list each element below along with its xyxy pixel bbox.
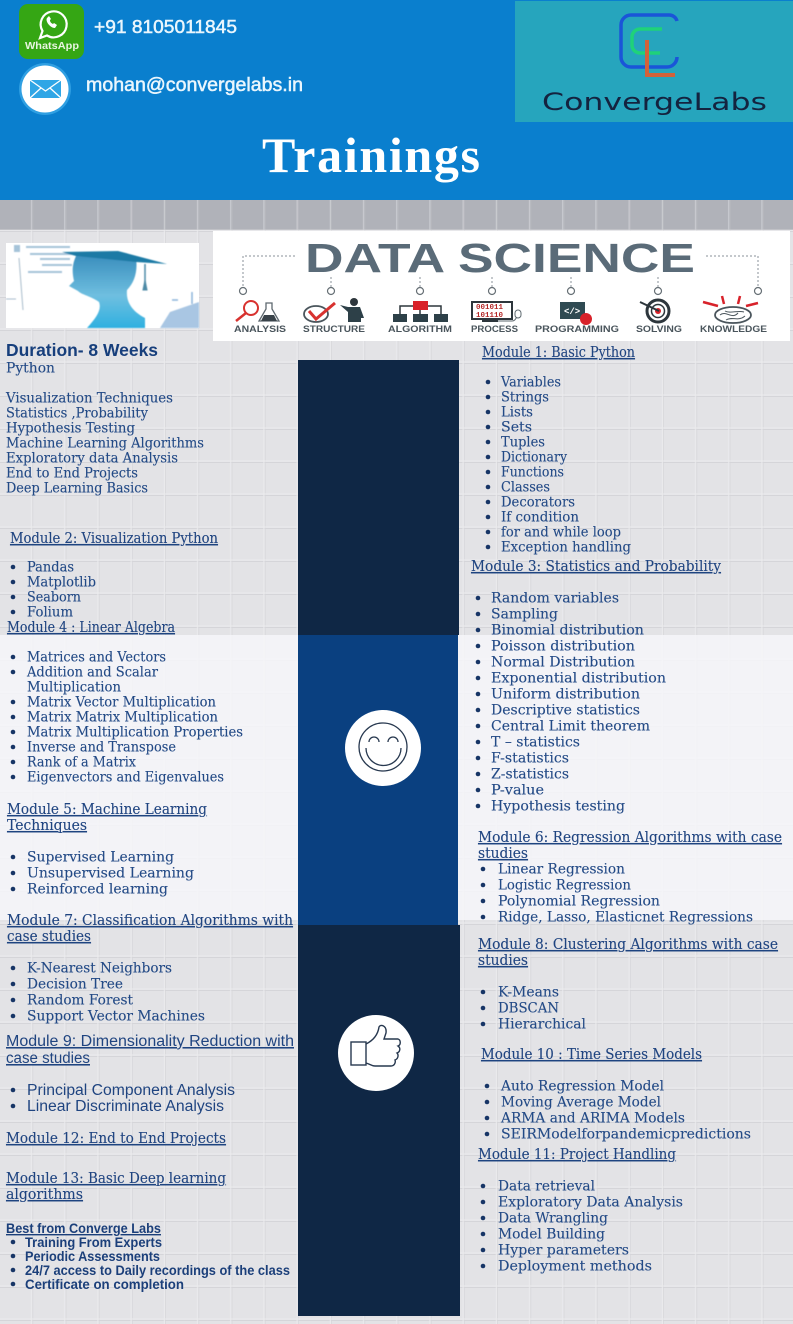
module 6: Module 6: Regression Algorithms with case (478, 830, 782, 846)
module 11: Data Wrangling (498, 1211, 608, 1227)
module 3: Exponential distribution (491, 671, 666, 687)
module 9 (6, 1033, 294, 1115)
overview list: Visualization Techniques (5, 391, 173, 407)
module 4: Rank of a Matrix (27, 755, 136, 771)
module 1: Variables (500, 375, 561, 391)
overview list: Exploratory data Analysis (6, 451, 178, 467)
module 1 (482, 345, 635, 556)
module 3: P-value (491, 783, 544, 799)
best from converge labs: Certificate on completion (25, 1276, 184, 1292)
icon: knowledge (703, 296, 758, 323)
module 6 (478, 830, 782, 926)
banner connector dots (240, 288, 762, 294)
banner labels: ANALYSIS (234, 324, 286, 335)
module 11: Hyper parameters (498, 1243, 629, 1259)
module 6: Linear Regression (498, 862, 625, 878)
module 1: Module 1: Basic Python (482, 345, 635, 361)
module 5: Techniques (7, 818, 87, 834)
overview list: End to End Projects (6, 466, 138, 482)
icon: process (472, 302, 521, 322)
module 13: Module 13: Basic Deep learning (6, 1171, 226, 1187)
icon: analysis (236, 301, 279, 321)
module 5: Unsupervised Learning (27, 866, 194, 882)
module 1: Decorators (501, 495, 575, 511)
module 3: Poisson distribution (491, 639, 635, 655)
banner labels: PROGRAMMING (535, 324, 619, 335)
module 3 (471, 559, 722, 815)
left column: duration and overview (5, 340, 204, 497)
icon: email (19, 63, 71, 115)
icon: smiley (345, 710, 421, 786)
module 10: SEIRModelforpandemicpredictions (501, 1127, 751, 1143)
module 2: Matplotlib (27, 575, 96, 591)
module 10: Module 10 : Time Series Models (481, 1047, 702, 1063)
module 7: Support Vector Machines (27, 1009, 205, 1025)
module 6: Polynomial Regression (498, 894, 660, 910)
best from converge labs (6, 1220, 290, 1292)
banner labels (234, 324, 767, 335)
module 3: Random variables (491, 591, 619, 607)
overview list: Statistics ,Probability (6, 406, 148, 422)
module 10: ARMA and ARIMA Models (500, 1111, 685, 1127)
module 6: Ridge, Lasso, Elasticnet Regressions (498, 910, 753, 926)
banner labels: ALGORITHM (388, 324, 452, 335)
data science banner (213, 231, 790, 341)
icon: structure (304, 298, 364, 322)
duration heading: Duration- 8 Weeks (6, 340, 158, 360)
best from converge labs: Periodic Assessments (25, 1248, 160, 1264)
module 2 (10, 531, 218, 621)
module 2: Pandas (27, 560, 74, 576)
header band (0, 0, 793, 200)
module 1: Tuples (501, 435, 545, 451)
banner labels: PROCESS (471, 324, 518, 335)
module 1: for and while loop (501, 525, 621, 541)
module 7: case studies (7, 929, 91, 945)
module 4: Inverse and Transpose (27, 740, 176, 756)
module 10 (481, 1047, 751, 1143)
module 3: Z-statistics (491, 767, 569, 783)
module 1: Functions (501, 465, 564, 481)
module 5 (7, 802, 207, 898)
logo panel: ConvergeLabs (542, 88, 767, 116)
module 13: algorithms (6, 1187, 83, 1203)
banner labels: SOLVING (636, 324, 682, 335)
module 3: Binomial distribution (491, 623, 644, 639)
module 3: Sampling (491, 607, 558, 623)
module 5: Reinforced learning (27, 882, 168, 898)
module 7: Module 7: Classification Algorithms with (7, 913, 293, 929)
best from converge labs: Best from Converge Labs (6, 1220, 161, 1236)
best from converge labs: 24/7 access to Daily recordings of the class (25, 1262, 290, 1278)
module 4: Matrix Multiplication Properties (27, 725, 243, 741)
phone number: +91 8105011845 (94, 16, 237, 37)
module 4: Module 4 : Linear Algebra (7, 620, 175, 636)
module 12: Module 12: End to End Projects (6, 1131, 226, 1147)
banner labels: STRUCTURE (303, 324, 365, 335)
module 11 (478, 1147, 683, 1275)
module 8: DBSCAN (498, 1001, 559, 1017)
module 6: Logistic Regression (498, 878, 631, 894)
module 11: Exploratory Data Analysis (498, 1195, 683, 1211)
overview list: Deep Learning Basics (6, 481, 148, 497)
module 5: Supervised Learning (27, 850, 174, 866)
overview list: Hypothesis Testing (6, 421, 135, 437)
module 11: Data retrieval (498, 1179, 595, 1195)
module 9: Module 9: Dimensionality Reduction with (6, 1033, 294, 1050)
module 1: If condition (501, 510, 579, 526)
module 1: Strings (501, 390, 549, 406)
icon: process: 001011 (476, 304, 504, 312)
module 3: Module 3: Statistics and Probability (471, 559, 722, 575)
module 8: studies (478, 953, 528, 969)
module 3: F-statistics (491, 751, 569, 767)
icon: WhatsApp (19, 4, 84, 59)
module 3: Uniform distribution (491, 687, 640, 703)
module 13 (6, 1171, 226, 1203)
module 2: Folium (27, 605, 73, 621)
module 3: Hypothesis testing (491, 799, 625, 815)
best from converge labs: Training From Experts (25, 1234, 162, 1250)
module 8: Hierarchical (498, 1017, 586, 1033)
overview list (5, 361, 204, 497)
module 7: Decision Tree (27, 977, 123, 993)
center column (298, 360, 460, 1316)
banner labels: KNOWLEDGE (700, 324, 767, 335)
module 2: Module 2: Visualization Python (10, 531, 218, 547)
module 7 (7, 913, 293, 1025)
icon: programming: </> (564, 307, 580, 317)
icon: thumbs up (338, 1015, 414, 1091)
overview list: Python (6, 361, 55, 377)
module 9: Principal Component Analysis (27, 1082, 235, 1099)
module 1: Dictionary (501, 450, 567, 466)
module 11: Module 11: Project Handling (478, 1147, 676, 1163)
module 8: K-Means (498, 985, 559, 1001)
module 3: Central Limit theorem (491, 719, 650, 735)
logo panel (515, 1, 793, 122)
module 2: Seaborn (27, 590, 81, 606)
banner connectors (243, 256, 758, 287)
email address: mohan@convergelabs.in (86, 74, 303, 96)
module 5: Module 5: Machine Learning (7, 802, 207, 818)
module 9: Linear Discriminate Analysis (27, 1098, 224, 1115)
icon: solving (640, 300, 669, 322)
module 4 (7, 620, 243, 786)
module 4: Multiplication (27, 680, 121, 696)
title: Trainings (262, 127, 480, 183)
icon: programming (560, 302, 592, 325)
module 11: Model Building (498, 1227, 605, 1243)
icon: algorithm (393, 301, 448, 322)
module 4: Matrices and Vectors (27, 650, 166, 666)
module 4: Matrix Matrix Multiplication (27, 710, 218, 726)
module 9: case studies (6, 1050, 90, 1067)
module 4: Eigenvectors and Eigenvalues (27, 770, 224, 786)
module 8: Module 8: Clustering Algorithms with case (478, 937, 778, 953)
module 3: Normal Distribution (491, 655, 635, 671)
icon: WhatsApp: WhatsApp (25, 40, 79, 52)
module 10: Moving Average Model (501, 1095, 661, 1111)
module 11: Deployment methods (498, 1259, 652, 1275)
module 1: Lists (501, 405, 533, 421)
overview list: Machine Learning Algorithms (6, 436, 204, 452)
module 3: T – statistics (491, 735, 580, 751)
module 10: Auto Regression Model (500, 1079, 664, 1095)
module 1: Exception handling (501, 540, 631, 556)
module 4: Matrix Vector Multiplication (27, 695, 216, 711)
module 1: Sets (501, 420, 532, 436)
module 7: Random Forest (27, 993, 134, 1009)
icon: process: 101110 (476, 312, 504, 320)
module 7: K-Nearest Neighbors (27, 961, 172, 977)
module 6: studies (478, 846, 528, 862)
image: graduate head (6, 243, 199, 328)
module 1: Classes (501, 480, 550, 496)
banner title: DATA SCIENCE (305, 235, 695, 281)
module 3: Descriptive statistics (491, 703, 640, 719)
module 8 (478, 937, 778, 1033)
module 4: Addition and Scalar (26, 665, 159, 681)
